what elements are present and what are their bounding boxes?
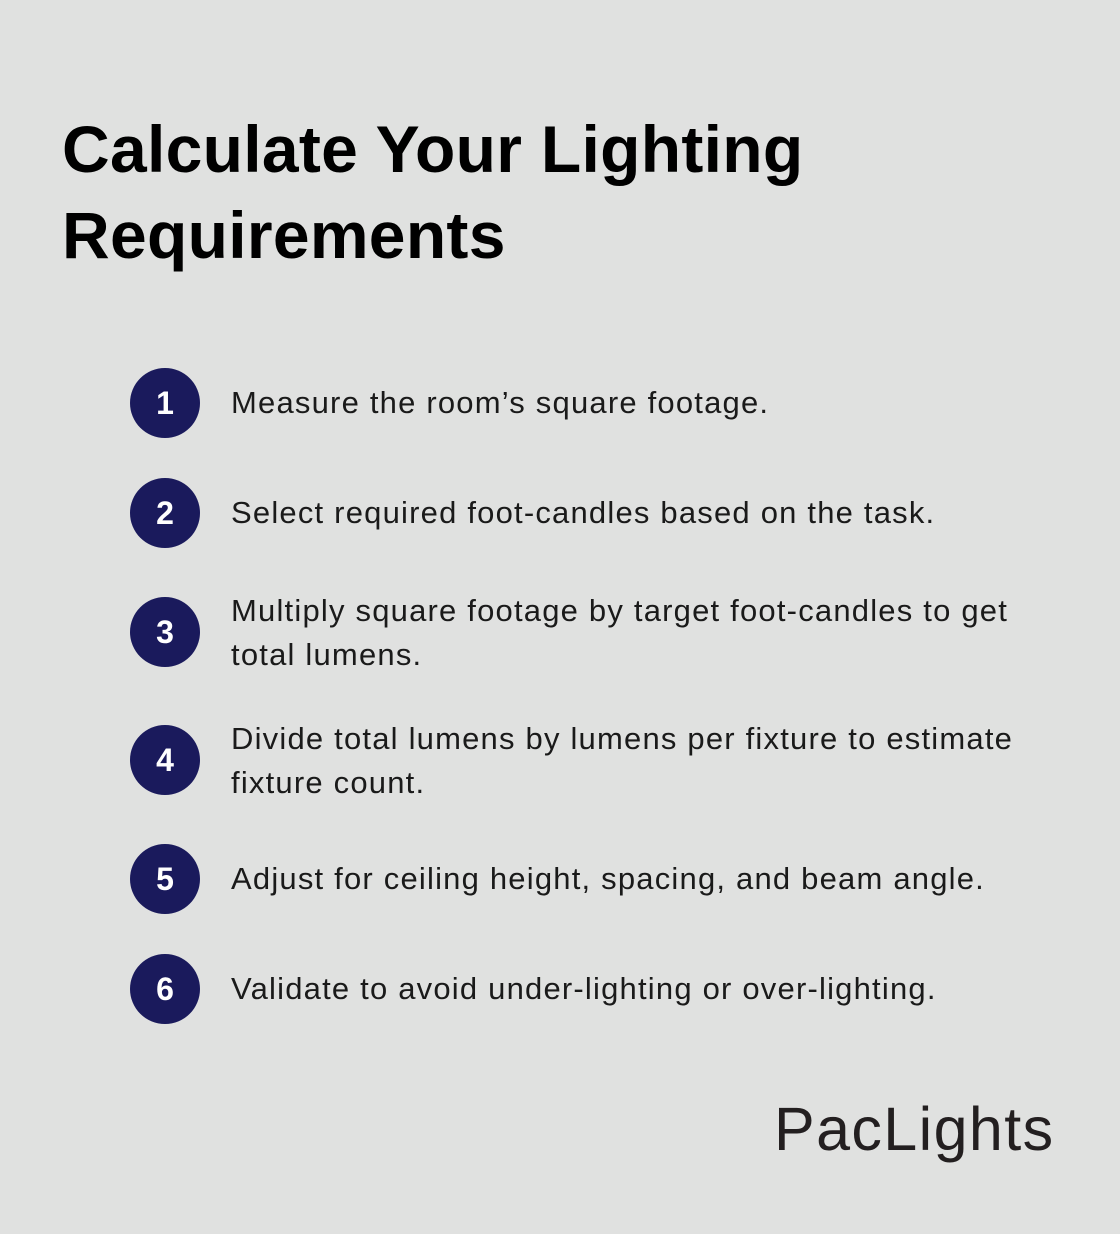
step 4: 4 [156, 742, 174, 778]
step 6: 6 [156, 971, 174, 1007]
title [62, 112, 804, 272]
step 3: Multiply square footage by target foot-candles to get [231, 593, 1008, 628]
step 3 [130, 593, 1008, 672]
step 3: 3 [156, 614, 174, 650]
step 3: total lumens. [231, 637, 422, 672]
step 4: fixture count. [231, 765, 425, 800]
title: Requirements [62, 198, 506, 272]
step 2 [130, 478, 935, 548]
step 6: Validate to avoid under-lighting or over-lighting. [231, 971, 937, 1006]
step 1: Measure the room’s square footage. [231, 385, 769, 420]
step 6 [130, 954, 937, 1024]
step 1 [130, 368, 769, 438]
logo: PacLights [774, 1095, 1054, 1163]
step 5 [130, 844, 985, 914]
step 4 [130, 721, 1013, 800]
step 5: 5 [156, 861, 174, 897]
step 5: Adjust for ceiling height, spacing, and beam angle. [231, 861, 985, 896]
step 2: 2 [156, 495, 174, 531]
step 4: Divide total lumens by lumens per fixture to estimate [231, 721, 1013, 756]
step 1: 1 [156, 385, 174, 421]
step 2: Select required foot-candles based on the task. [231, 495, 935, 530]
title: Calculate Your Lighting [62, 112, 804, 186]
